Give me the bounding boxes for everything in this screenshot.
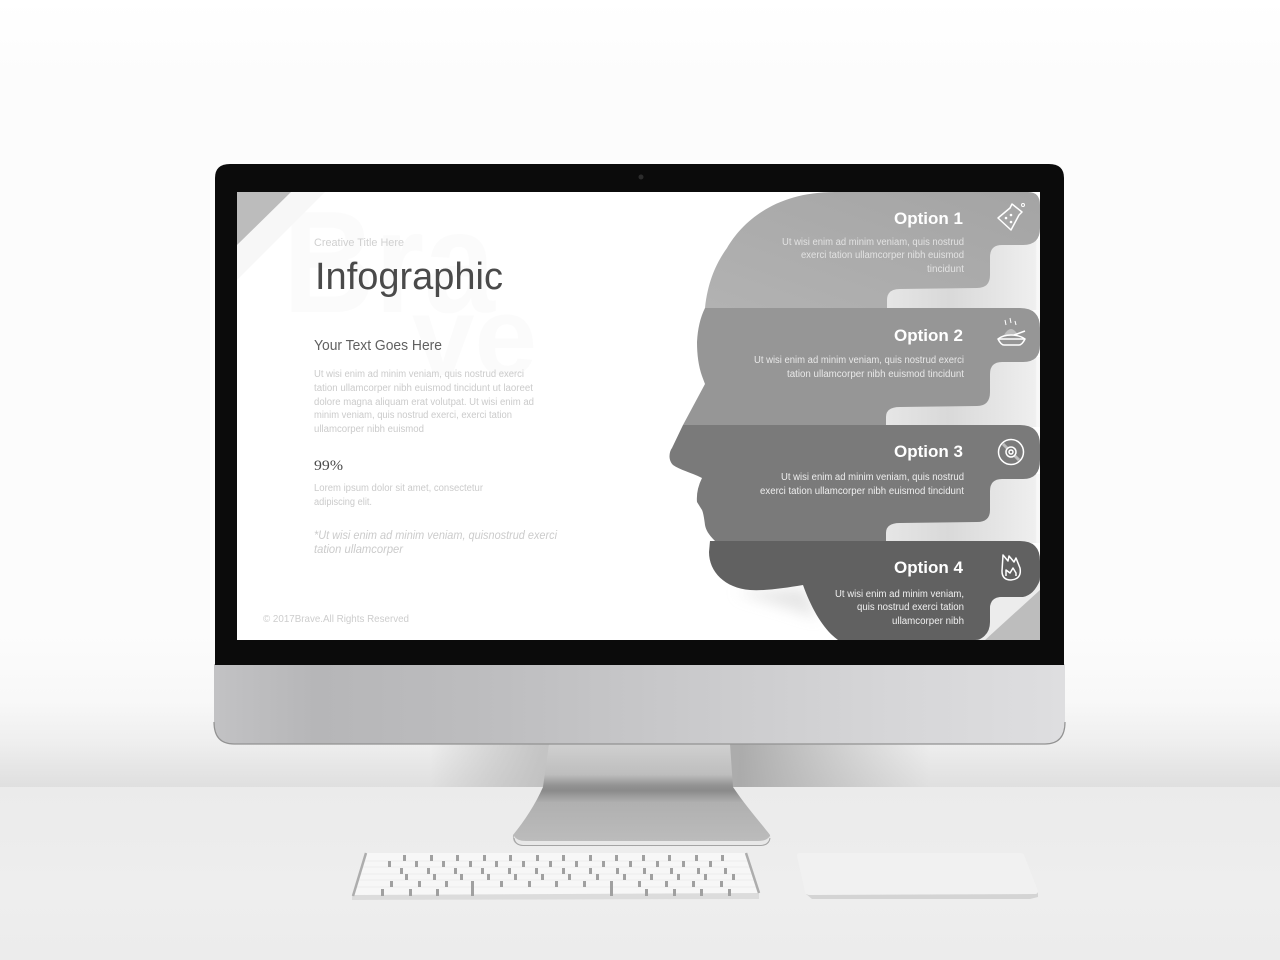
webcam [638,174,644,180]
option 4: Option 4 [894,558,964,577]
option 1: Option 1 [894,209,963,228]
option 4: quis nostrud exerci tation [857,602,964,613]
note: tation ullamcorper [314,544,404,556]
paragraph: Ut wisi enim ad minim veniam, quis nostrud exerci [314,369,524,380]
lobe backgrounds [886,240,1040,543]
note [314,530,557,556]
heading: Infographic [315,256,503,298]
monitor stand [513,744,770,846]
option 2: Ut wisi enim ad minim veniam, quis nostrud exerci [754,355,964,366]
text block: intro [314,337,534,435]
slide content [237,181,1040,640]
option 4 [835,555,1020,627]
option 1: exerci tation ullamcorper nibh euismod [801,250,964,261]
option 3: Ut wisi enim ad minim veniam, quis nostrud [781,472,964,483]
watermark: Brave: ve [412,274,537,399]
keyboard [352,853,759,900]
paragraph: ullamcorper nibh euismod [314,424,424,435]
monitor bezel [215,164,1064,665]
option 4: Ut wisi enim ad minim veniam, [835,589,964,600]
paragraph [314,369,534,435]
option 3 [760,440,1024,497]
monitor [214,164,1065,846]
stat: 99%: Lorem ipsum dolor sit amet, consectetur [314,483,484,494]
option 1: Ut wisi enim ad minim veniam, quis nostrud [782,237,964,248]
head band 4 [709,541,1040,640]
option 2: tation ullamcorper nibh euismod tincidunt [787,369,964,380]
note: *Ut wisi enim ad minim veniam, quisnostrud exerci [314,530,557,542]
screen [237,192,1040,640]
key gaps [381,855,735,896]
paragraph: tation ullamcorper nibh euismod tincidunt ut laoreet [314,383,533,394]
option 3: exerci tation ullamcorper nibh euismod tincidunt [760,486,964,497]
paragraph: minim veniam, quis nostrud exerci, exerci tation [314,410,512,421]
watermark: Brave: Bra [283,181,496,343]
stat: 99%: 99% [314,458,343,474]
text block: title [314,237,503,298]
eyebrow: Creative Title Here [314,237,404,249]
chin shadow [752,586,814,616]
corner fold: bottom right [978,580,1040,640]
subheading: Your Text Goes Here [314,337,442,354]
option 4: ullamcorper nibh [892,616,964,627]
icon: flame [1002,555,1020,580]
stat: 99%: adipiscing elit. [314,497,372,508]
head band 2 [683,308,1040,425]
head band 1 [705,192,1040,308]
option 2: Option 2 [894,326,963,345]
stat: 99% [314,458,484,508]
footer: © 2017Brave.All Rights Reserved [263,613,409,625]
monitor chin [214,664,1065,744]
trackpad [797,853,1038,899]
keyboard body [352,853,759,900]
paragraph: dolore magna aliquam erat volutpat. Ut wisi enim ad [314,397,534,408]
option 3: Option 3 [894,442,963,461]
head band 3 [670,425,1040,541]
option 1 [782,204,1024,275]
option 2 [754,318,1025,380]
icon: disc [998,440,1024,464]
icon: bowl [998,318,1025,345]
icon: flask [998,204,1024,230]
corner fold: top left [237,192,291,245]
option 1: tincidunt [927,264,964,275]
